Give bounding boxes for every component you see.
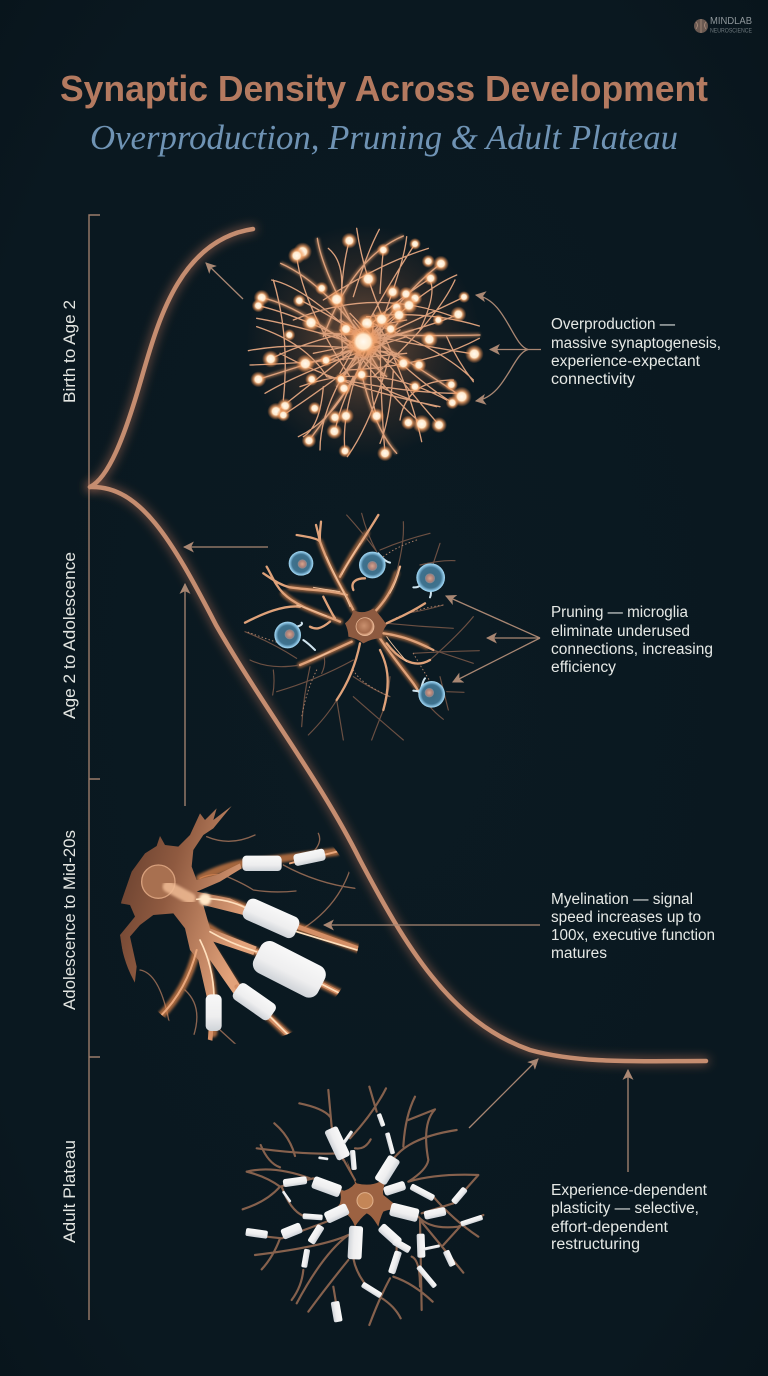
arrow: myelination callout to image [324,924,540,926]
callout: experience-dependent plasticity: Experience-dependent [551,1182,708,1199]
myelin sheaths [245,1113,483,1323]
thin dendrites [140,833,355,1047]
arrow: myelination image up to curve [184,584,186,806]
callout: experience-dependent plasticity: plasticity — selective, [551,1200,699,1217]
callout: overproduction: connectivity [551,371,635,388]
callout: myelination: 100x, executive function [551,927,715,944]
branching dendrites [243,1087,483,1325]
callout: pruning: eliminate underused [551,623,690,640]
timeline axis with ticks [89,215,100,1320]
subtitle: Overproduction, Pruning & Adult Plateau [90,118,678,157]
stage label: Age 2 to Adolescence: Age 2 to Adolescence [60,552,79,719]
callout: overproduction: Overproduction — [551,316,675,333]
callout: pruning: connections, increasing [551,641,713,658]
illustration: overproduction synapse cluster [247,225,484,461]
particle debris [247,540,443,717]
logo: MindLab Neuroscience [694,16,752,34]
callout: myelination: matures [551,945,607,962]
title: Synaptic Density Across Development [60,68,708,109]
stage label: Birth to Age 2: Birth to Age 2 [60,300,79,403]
myelin sheaths [206,848,329,1031]
faded pruned dendrites [245,513,479,740]
star soma [325,1160,402,1227]
callout: pruning: efficiency [551,659,616,676]
microglia cells [274,551,445,708]
arrow fork: overproduction callout [476,295,541,401]
stage label: Adolescence to Mid-20s: Adolescence to Mid-20s [60,830,79,1010]
callout: experience-dependent plasticity: restructuring [551,1236,640,1253]
bright dendrites [245,515,433,710]
logo: MindLab Neuroscience: NEUROSCIENCE [710,28,752,34]
arrow: pruning image to falling curve [184,546,268,548]
logo: MindLab Neuroscience: MINDLAB [710,16,752,27]
neuron body [120,806,257,997]
callout: pruning: Pruning — microglia [551,604,688,621]
arrow: plasticity callout to plateau [627,1070,629,1172]
callout: myelination: Myelination — signal [551,891,693,908]
synaptic density curve [90,229,706,1061]
synapse glow points [250,233,484,461]
arrow: overproduction image to rising curve [206,263,243,299]
arrow fork: pruning callout [446,596,540,682]
callout: experience-dependent plasticity: effort-dependent [551,1219,669,1236]
callout: overproduction: experience-expectant [551,353,701,370]
illustration: myelinating neuron in circular crop [120,806,360,1047]
arrow: adult neuron to plateau curve [469,1059,538,1128]
callout: myelination: speed increases up to [551,909,701,926]
illustration: pruning neuron with microglia [245,513,479,740]
neuron soma [345,608,387,643]
illustration: adult neuron with myelinated branches [243,1087,483,1325]
stage label: Adult Plateau: Adult Plateau [60,1140,79,1243]
callout: overproduction: massive synaptogenesis, [551,335,721,352]
